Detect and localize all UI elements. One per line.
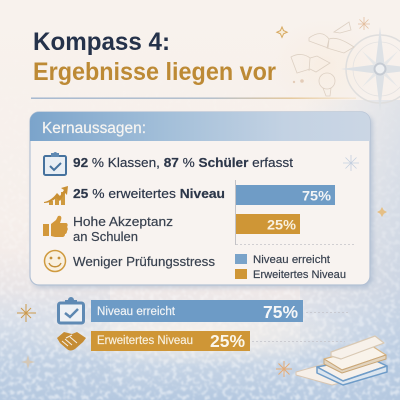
dashed leader 2: [252, 340, 345, 342]
text: Hohe Akzeptanz: Hohe Akzeptanz: [73, 214, 173, 229]
bar: Niveau erreicht: [91, 300, 303, 322]
text: Klassen und Schueler: 92 % Klassen, 87 % Schüler erfasst: [73, 155, 293, 170]
icon: thumbs up: [43, 216, 68, 237]
bar: Erweitertes Niveau: Erweitertes Niveau: [97, 335, 193, 347]
bar: Erweitertes Niveau: 25%: [210, 331, 245, 351]
sparkle: panel star: [343, 155, 359, 171]
bar: Erweitertes Niveau: [91, 331, 250, 351]
icon: handshake: [57, 332, 86, 350]
bar chart: [236, 180, 356, 245]
legend: Erweitertes Niveau: [253, 269, 346, 281]
bar: Niveau erreicht: Niveau erreicht: [97, 306, 176, 318]
bar: 75 percent: 75%: [302, 188, 332, 204]
text: an Schulen: an Schulen: [73, 229, 138, 244]
legend: Niveau erreicht: [253, 254, 330, 266]
icon: rising chart: [44, 186, 68, 205]
sparkle: gold right: [377, 207, 387, 217]
sparkle: gold left: [17, 304, 36, 322]
bar: 25 percent: 25%: [267, 216, 297, 232]
sparkle: gold top: [277, 27, 287, 37]
text: Weniger Pruefungsstress: Weniger Prüfungsstress: [73, 254, 215, 269]
sparkle: asterisk top: [358, 17, 370, 30]
panel: Kernaussagen: [30, 112, 370, 285]
sparkle: orange right: [276, 361, 292, 377]
legend: [235, 254, 346, 281]
icon: smiley: [44, 250, 66, 272]
panel heading: Kernaussagen:: [42, 120, 146, 137]
text: erweitertes Niveau: 25 % erweitertes Niveau: [73, 186, 225, 201]
icon: clipboard bottom: [58, 297, 84, 323]
dashed leader 1: [306, 312, 349, 314]
title: Kompass 4:: [33, 28, 170, 56]
title: Ergebnisse liegen vor: [33, 58, 276, 86]
panel header: [30, 112, 370, 141]
bar: Niveau erreicht: 75%: [263, 302, 298, 322]
decoration: compass and books: [291, 22, 400, 111]
decoration: stack of books: [296, 336, 387, 385]
icon: clipboard: [44, 152, 66, 175]
sparkle: faint left: [21, 355, 35, 369]
title: [33, 28, 276, 86]
title rule: [31, 98, 356, 99]
panel shadow: [32, 115, 373, 288]
